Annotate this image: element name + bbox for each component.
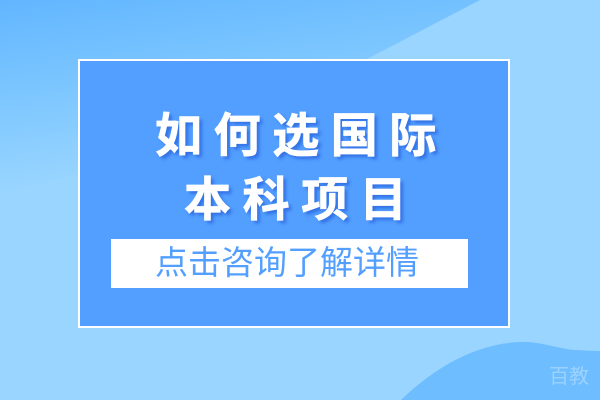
top-left background wedge: [0, 0, 480, 195]
call-to-action text: 点击咨询了解详情: [155, 244, 419, 281]
call-to-action bar: [111, 239, 468, 288]
bottom-right wave: [401, 342, 600, 400]
main panel: [78, 59, 510, 328]
title line 1: 如何选国际: [155, 109, 448, 162]
title line 2: 本科项目: [184, 173, 418, 226]
watermark: 百教: [549, 366, 589, 388]
